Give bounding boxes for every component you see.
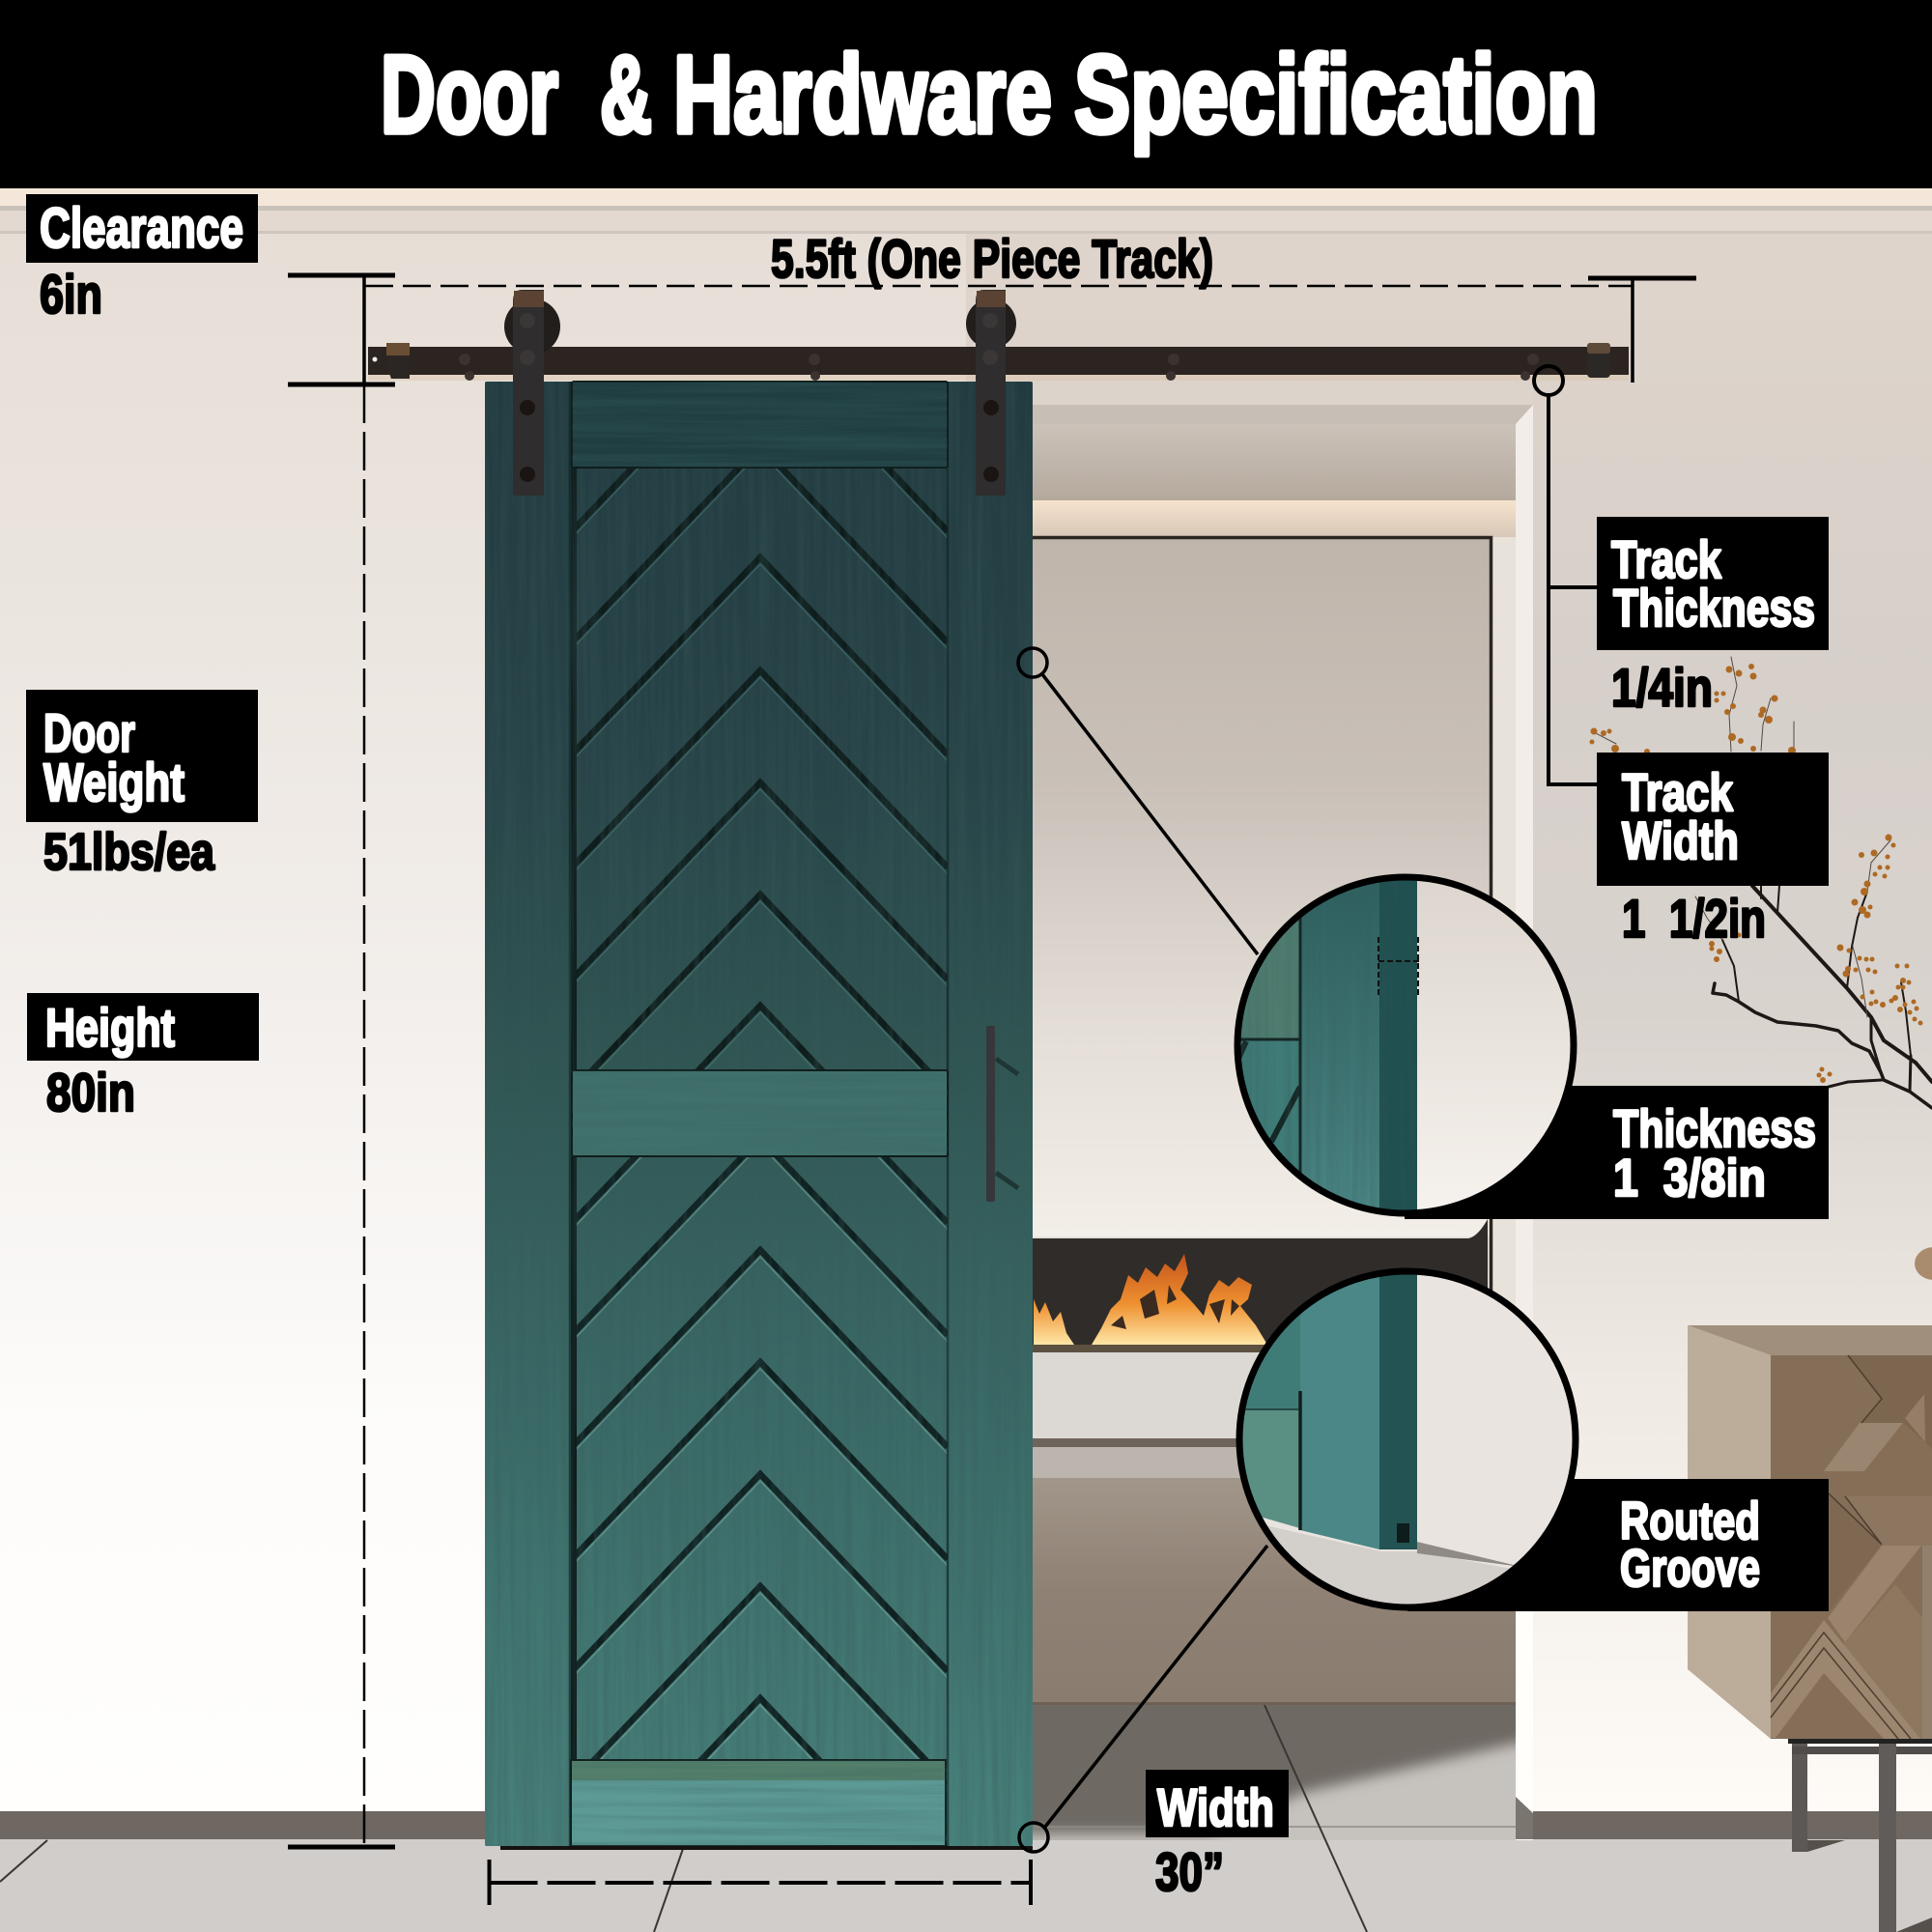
label: routed groove <box>1407 1479 1829 1611</box>
label: track thickness: Track <box>1611 529 1721 589</box>
middle rail <box>572 1070 948 1156</box>
label: width: Width <box>1157 1777 1274 1837</box>
label: thickness: 1 3/8in <box>1613 1148 1766 1208</box>
callout leader: thickness <box>1018 648 1258 954</box>
track length label: 5.5ft (One Piece Track) <box>771 228 1213 289</box>
flame gaps <box>1111 1285 1239 1329</box>
dimension: door height and clearance <box>288 275 395 1847</box>
label: thickness <box>1405 1086 1829 1219</box>
fireplace <box>1024 1219 1488 1352</box>
twigs <box>1594 657 1932 1108</box>
cabinet side <box>1688 1325 1771 1739</box>
label: track width: Width <box>1622 810 1739 870</box>
label: door weight: Weight <box>43 752 185 812</box>
label: width: 30” <box>1155 1841 1224 1902</box>
label: width <box>1146 1770 1289 1902</box>
label: height: 80in <box>46 1062 135 1122</box>
interior floor <box>1024 1705 1516 1840</box>
label: track thickness: 1/4in <box>1611 657 1713 718</box>
handle <box>986 1026 1018 1202</box>
label: height: Height <box>45 997 175 1058</box>
barn door track <box>368 290 1629 496</box>
dimension: track length <box>365 278 1696 383</box>
right hanger <box>966 290 1016 496</box>
title: & <box>600 34 652 156</box>
bottom rail <box>571 1760 946 1846</box>
label: clearance <box>26 194 258 326</box>
door bottom shadow <box>500 1846 1033 1850</box>
decorative branches with berries <box>1590 657 1932 1108</box>
label: height <box>27 993 259 1122</box>
callout leaders: track <box>1534 366 1597 784</box>
label: track width: 1 1/2in <box>1622 888 1766 949</box>
floor tile lines <box>0 1840 684 1932</box>
cabinet top <box>1688 1325 1932 1355</box>
geometric relief panels <box>1771 1355 1932 1739</box>
cabinet front <box>1771 1355 1932 1739</box>
magnifier: routed groove detail <box>1227 1261 1584 1623</box>
callout leader: routed groove <box>1019 1546 1267 1852</box>
label: door weight: 51lbs/ea <box>43 823 215 881</box>
label: routed groove: Routed <box>1620 1491 1760 1550</box>
label: door weight: Door <box>43 702 135 763</box>
title <box>381 34 1598 156</box>
doorway interior <box>1005 383 1536 1932</box>
rug <box>1024 1478 1516 1702</box>
baseboard <box>0 1811 1932 1839</box>
label: clearance: Clearance <box>40 197 243 260</box>
title: Hardware <box>673 34 1052 156</box>
magnifier: door thickness detail <box>1227 869 1584 1227</box>
crown moulding <box>0 188 1932 234</box>
sideboard cabinet <box>1688 1325 1932 1932</box>
label: track width <box>1597 753 1829 949</box>
floor <box>0 1839 1932 1932</box>
top rail <box>572 382 948 468</box>
title band <box>0 0 1932 188</box>
cabinet legs <box>1792 1740 1932 1932</box>
door slab <box>485 382 1033 1846</box>
chevron panel lower <box>577 1157 948 1759</box>
title: Specification <box>1074 34 1598 156</box>
rail grain <box>572 382 948 1846</box>
vase on cabinet <box>1915 1247 1932 1280</box>
interior frame line <box>1024 537 1492 1449</box>
track bolts <box>459 354 1539 381</box>
barn door <box>485 333 1033 1902</box>
label: track thickness: Thickness <box>1613 578 1815 638</box>
stile grain <box>485 382 1033 1846</box>
title: Door <box>381 34 558 156</box>
chevron panel upper <box>577 469 948 1069</box>
left hanger <box>504 290 560 496</box>
label: track thickness <box>1597 517 1829 718</box>
label: track width: Track <box>1622 762 1733 822</box>
label: thickness: Thickness <box>1613 1098 1816 1158</box>
floor tile lines <box>1034 1705 1516 1932</box>
door trim <box>1516 405 1533 1840</box>
panel shadow edges <box>571 468 577 1759</box>
track stops <box>386 343 410 379</box>
flames <box>1034 1254 1267 1345</box>
rail <box>368 347 1629 375</box>
dimension: door width <box>489 1860 1031 1905</box>
floor shadow <box>1033 1705 1516 1840</box>
label: door weight <box>26 690 258 881</box>
interior wall panel <box>1024 537 1492 1236</box>
label: clearance: 6in <box>40 264 102 326</box>
label: routed groove: Groove <box>1620 1538 1760 1598</box>
berries <box>1590 664 1922 1083</box>
